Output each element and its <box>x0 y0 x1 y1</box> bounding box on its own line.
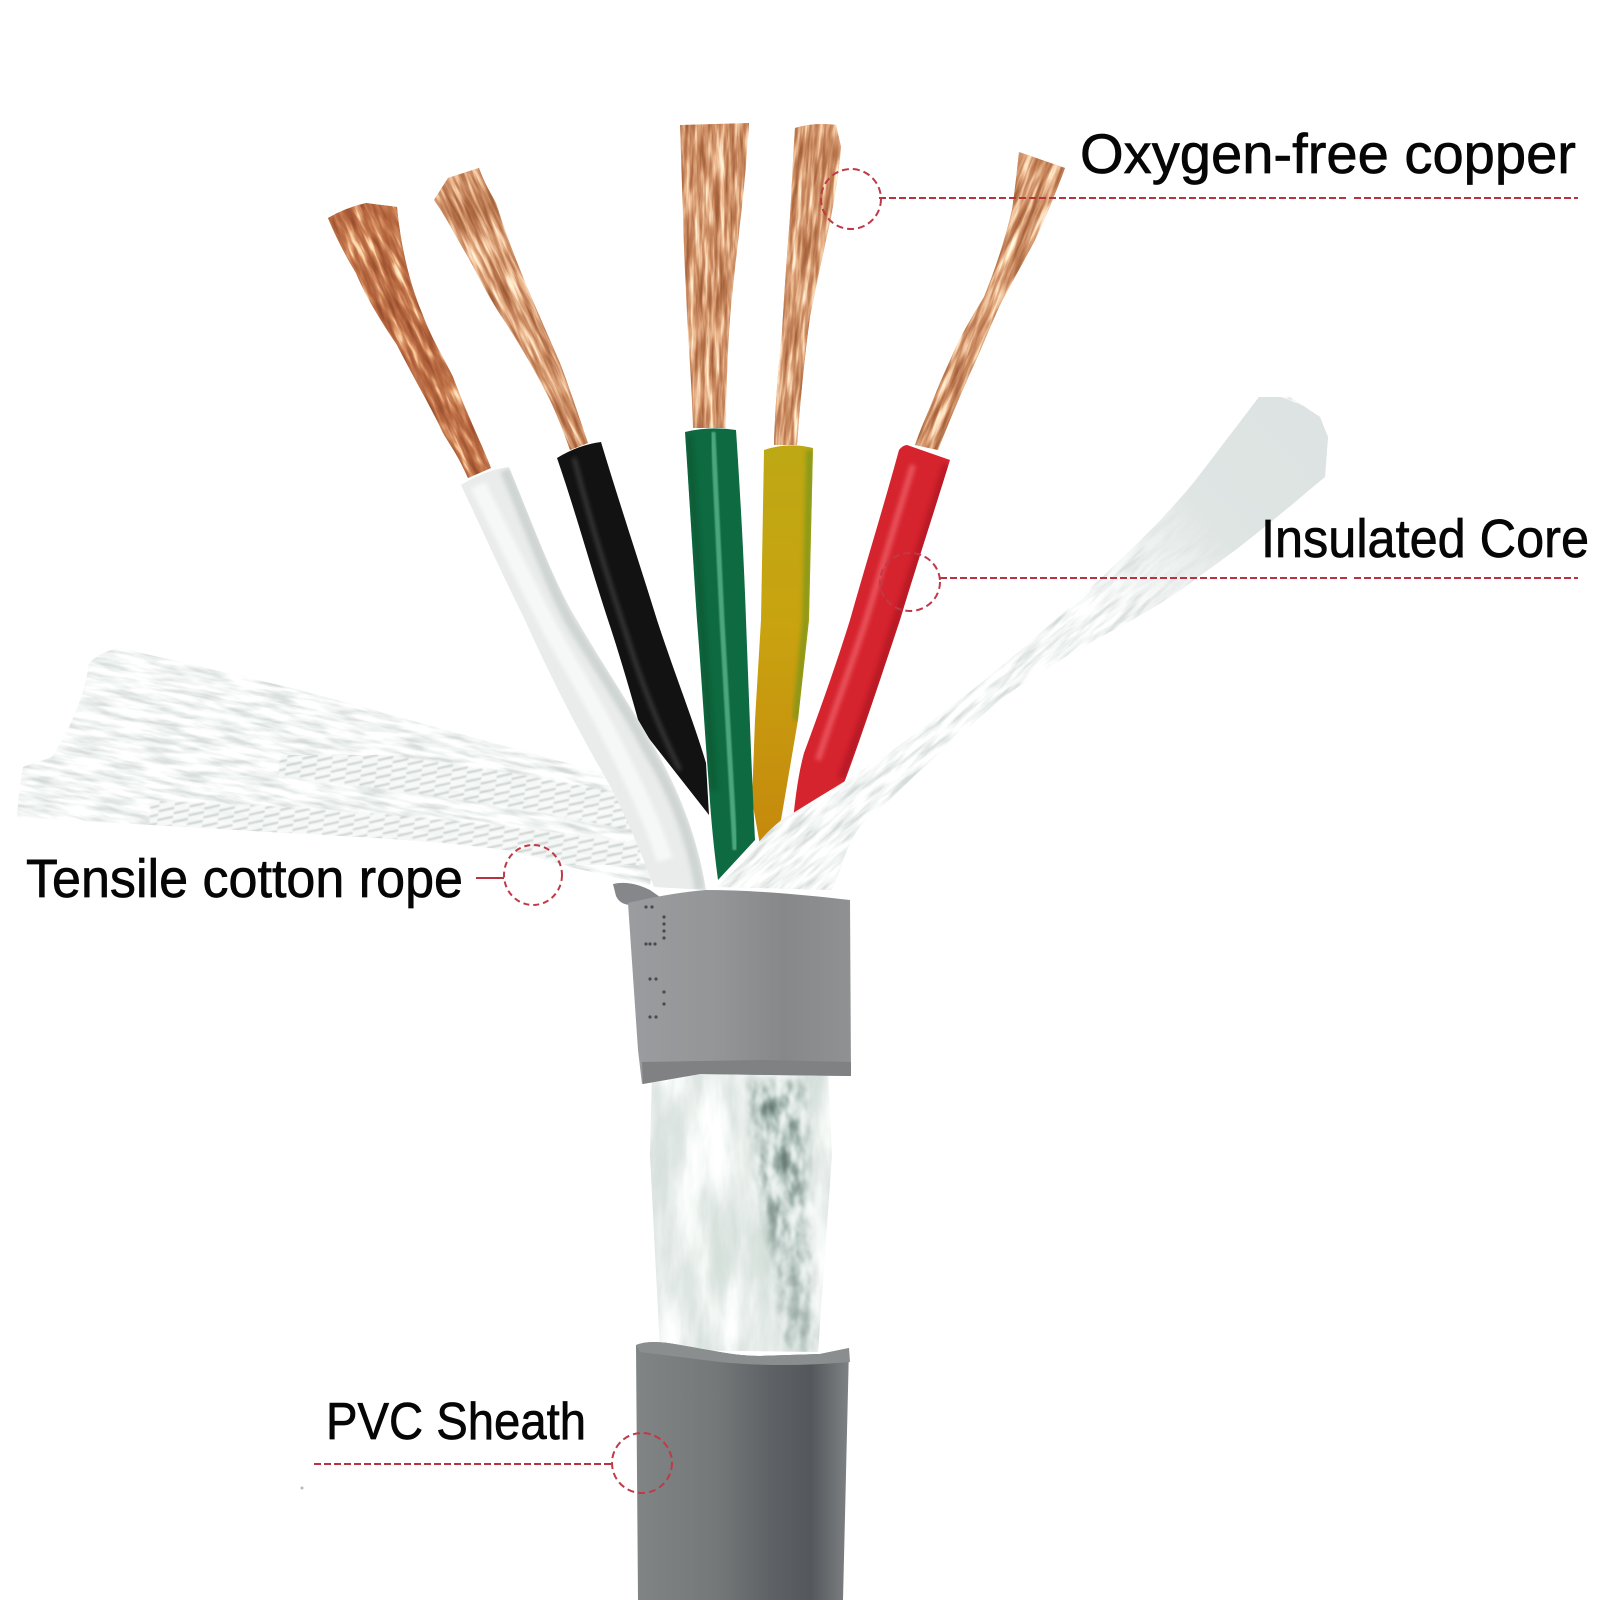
copper strand 3 <box>680 123 749 428</box>
speck <box>300 1486 304 1490</box>
tensile cotton rope: right <box>718 397 1328 890</box>
insulated core: white <box>455 460 710 895</box>
callout: oxygen-free copper <box>821 122 1578 229</box>
callout: PVC sheath <box>314 1393 672 1493</box>
callout: tensile cotton rope <box>26 845 562 909</box>
insulated core: yellow <box>752 445 813 842</box>
cotton filler core <box>650 1074 832 1352</box>
insulated core: black <box>557 442 709 815</box>
label: Oxygen-free copper <box>1080 122 1576 185</box>
label: PVC Sheath <box>326 1393 586 1451</box>
rope feather bands <box>150 760 640 860</box>
PVC sheath: stripped upper section <box>628 890 851 1084</box>
copper strand 4 <box>774 124 841 445</box>
copper strand 5 <box>915 152 1065 450</box>
insulated core: red <box>794 445 950 813</box>
crumpled sheath edge <box>613 883 660 905</box>
tensile cotton rope: left <box>17 650 651 885</box>
copper strand 1 <box>328 203 491 478</box>
callout: insulated core <box>880 509 1589 611</box>
copper strand 2 <box>434 168 588 450</box>
insulated core: green <box>685 428 755 880</box>
label: Tensile cotton rope <box>26 849 463 909</box>
printed dots <box>644 905 666 1019</box>
PVC sheath: lower section <box>636 1342 850 1600</box>
